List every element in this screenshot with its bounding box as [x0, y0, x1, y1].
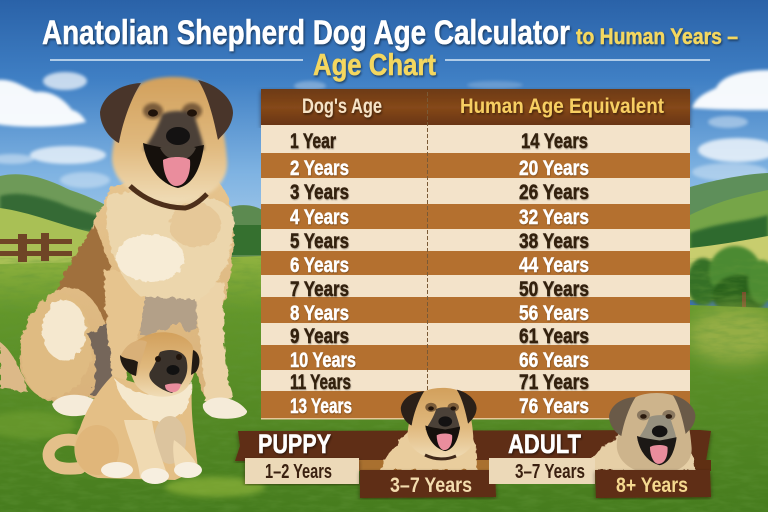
- puppy tongue: [165, 383, 181, 392]
- puppy label: PUPPY: [258, 429, 331, 459]
- dog age column: 7 Years: [290, 278, 349, 301]
- eye patches: [143, 103, 163, 119]
- human age column: 50 Years: [519, 278, 589, 301]
- tail: [0, 342, 28, 392]
- junior age ribbon: [360, 470, 496, 498]
- puppy ruff: [114, 378, 192, 422]
- puppy eyes: [155, 356, 161, 362]
- human age column: 76 Years: [519, 395, 589, 418]
- hills and trees right: [687, 173, 768, 315]
- front leg right: [194, 282, 234, 402]
- eyes: [148, 109, 158, 117]
- title: to Human Years –: [576, 24, 738, 49]
- between-leg shadow: [140, 285, 198, 335]
- title: Anatolian Shepherd Dog Age Calculator: [42, 14, 570, 52]
- dog age column: 9 Years: [290, 325, 349, 348]
- portrait body: [380, 428, 477, 470]
- dog age column: 6 Years: [290, 254, 349, 277]
- puppy age plaque: [245, 458, 359, 484]
- senior age ribbon: 8+ Years: [616, 474, 688, 497]
- head: [112, 77, 227, 202]
- human age column: 44 Years: [519, 254, 589, 277]
- brown back shading: [56, 225, 110, 325]
- puppy mask: [149, 350, 187, 393]
- table header: [261, 89, 690, 126]
- dog age column: 13 Years: [290, 395, 352, 418]
- puppy head: [129, 332, 195, 397]
- large adult dog illustration: [0, 77, 247, 419]
- wooden fence: [0, 233, 72, 262]
- middle adult dog portrait: [380, 388, 477, 470]
- senior age ribbon: [595, 470, 711, 498]
- dog age column: 11 Years: [290, 371, 351, 394]
- adult label: ADULT: [508, 429, 581, 459]
- puppy nose: [166, 365, 180, 375]
- tongue: [163, 157, 190, 186]
- dog age column: [290, 130, 356, 418]
- adult age plaque: [489, 458, 595, 484]
- dog age column: 10 Years: [290, 349, 356, 372]
- paws: [52, 395, 98, 416]
- puppy ears: [121, 340, 147, 375]
- table header labels: Dog's Age: [302, 95, 382, 118]
- belly shadow: [88, 320, 120, 396]
- mouth: [143, 143, 204, 188]
- adult age plaque: 3–7 Years: [515, 461, 585, 483]
- human age column: 38 Years: [519, 230, 589, 253]
- table rows: [261, 125, 690, 420]
- collar: [130, 186, 207, 208]
- ears: [100, 83, 141, 143]
- title: Age Chart: [313, 47, 436, 82]
- puppy front legs: [124, 420, 168, 478]
- dog age column: 2 Years: [290, 157, 349, 180]
- muzzle: [143, 111, 204, 150]
- meadow grass: [0, 256, 768, 512]
- senior dog portrait: [585, 393, 695, 474]
- table header labels: Human Age Equivalent: [460, 95, 664, 118]
- human age column: 66 Years: [519, 349, 589, 372]
- human age column: 56 Years: [519, 302, 589, 325]
- puppy and adult ribbon: [235, 430, 711, 461]
- title: [42, 14, 738, 82]
- life-stage ribbon band: [235, 430, 711, 471]
- front leg left: [105, 270, 147, 385]
- human age column: 20 Years: [519, 157, 589, 180]
- clouds: [0, 70, 768, 188]
- puppy paws: [141, 468, 169, 484]
- human age column: 14 Years: [521, 130, 588, 153]
- dog age column: 1 Year: [290, 130, 336, 153]
- haunch: [21, 292, 92, 398]
- dog age column: 5 Years: [290, 230, 349, 253]
- portrait body: [585, 435, 695, 470]
- table header labels: [302, 95, 664, 118]
- puppy tail: [49, 440, 80, 469]
- puppy belly: [154, 416, 186, 464]
- puppy age plaque: 1–2 Years: [265, 461, 332, 483]
- human age column: 71 Years: [519, 371, 589, 394]
- puppy body: [74, 376, 198, 480]
- human age column: 32 Years: [519, 206, 589, 229]
- dog age column: 3 Years: [290, 181, 349, 204]
- puppy illustration: [49, 332, 202, 484]
- human age column: 26 Years: [519, 181, 589, 204]
- human age column: 61 Years: [519, 325, 589, 348]
- hills left: [0, 174, 262, 290]
- background sky: [0, 0, 768, 280]
- nose: [166, 127, 190, 145]
- puppy haunch: [75, 425, 119, 475]
- chest ruff: [107, 192, 233, 300]
- junior age ribbon: 3–7 Years: [390, 474, 472, 497]
- human age column: [519, 130, 589, 418]
- dog age column: 4 Years: [290, 206, 349, 229]
- age table: [261, 89, 690, 420]
- body: [20, 178, 234, 402]
- dog age column: 8 Years: [290, 302, 349, 325]
